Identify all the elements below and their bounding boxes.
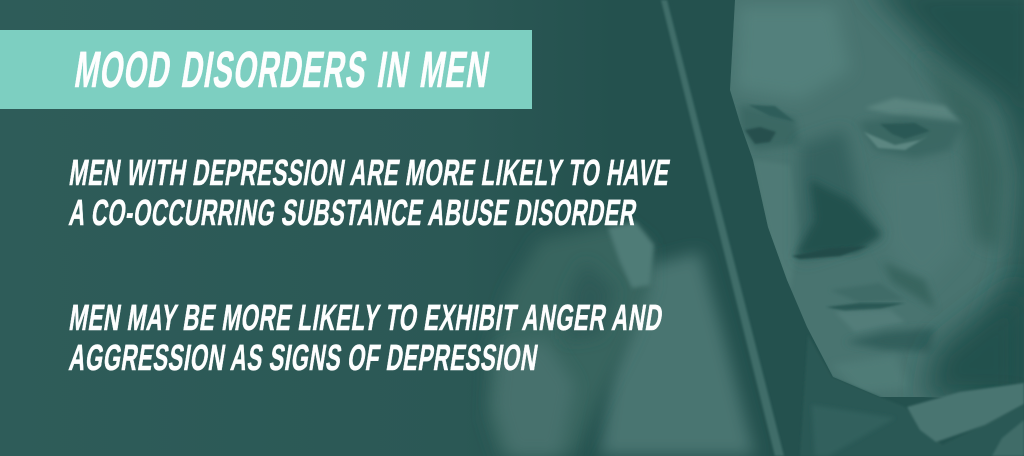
eye socket shadow left [740, 105, 800, 150]
banner background [0, 30, 515, 109]
upper lip shadow [841, 286, 896, 301]
eye socket right [858, 116, 965, 158]
text block: anger and aggression [67, 297, 666, 378]
cheek highlight [880, 165, 960, 290]
eye left [745, 127, 776, 144]
nose shadow [795, 180, 882, 256]
photo: man reflected in mirror [488, 0, 1024, 456]
face base [720, 0, 1024, 400]
reflection: ear [608, 222, 654, 288]
temple shading [936, 76, 1004, 246]
nostril line [792, 246, 868, 259]
brow right [870, 98, 958, 122]
mirror edge rod [661, 0, 784, 456]
hair and right shadow [865, 0, 1024, 420]
text block: substance abuse: A CO-OCCURRING SUBSTANCE ABUSE DISORDER [67, 192, 640, 233]
nose bridge shadow [795, 132, 874, 244]
reflection: cheek [494, 340, 575, 456]
jaw shadow [925, 280, 1024, 400]
text block: anger and aggression: MEN MAY BE MORE LIKELY TO EXHIBIT ANGER AND [67, 297, 666, 338]
brow left [750, 104, 792, 121]
reflection: shoulder and neck [600, 252, 755, 456]
chin highlight [832, 355, 910, 392]
shirt lower right [992, 420, 1024, 456]
nose-mouth crease [886, 265, 932, 305]
neck and shirt [800, 335, 1024, 456]
under-eye highlight [866, 132, 921, 150]
left cheek band [766, 221, 788, 280]
lower lip shadow [845, 328, 935, 352]
forehead highlight [739, 8, 844, 94]
lower lip highlight [841, 310, 899, 330]
shirt collar [907, 383, 1024, 442]
title banner [0, 30, 532, 109]
main face [720, 0, 1024, 420]
mouth [826, 303, 905, 311]
shirt placket [812, 405, 895, 456]
eye right [880, 123, 930, 139]
reflection: face shadow [565, 262, 615, 340]
text block: anger and aggression: AGGRESSION AS SIGNS OF DEPRESSION [67, 337, 541, 378]
reflection: head [488, 222, 650, 456]
dark strip beside rod [672, 0, 806, 456]
text block: substance abuse [67, 152, 673, 233]
title: MOOD DISORDERS IN MEN [71, 41, 494, 98]
